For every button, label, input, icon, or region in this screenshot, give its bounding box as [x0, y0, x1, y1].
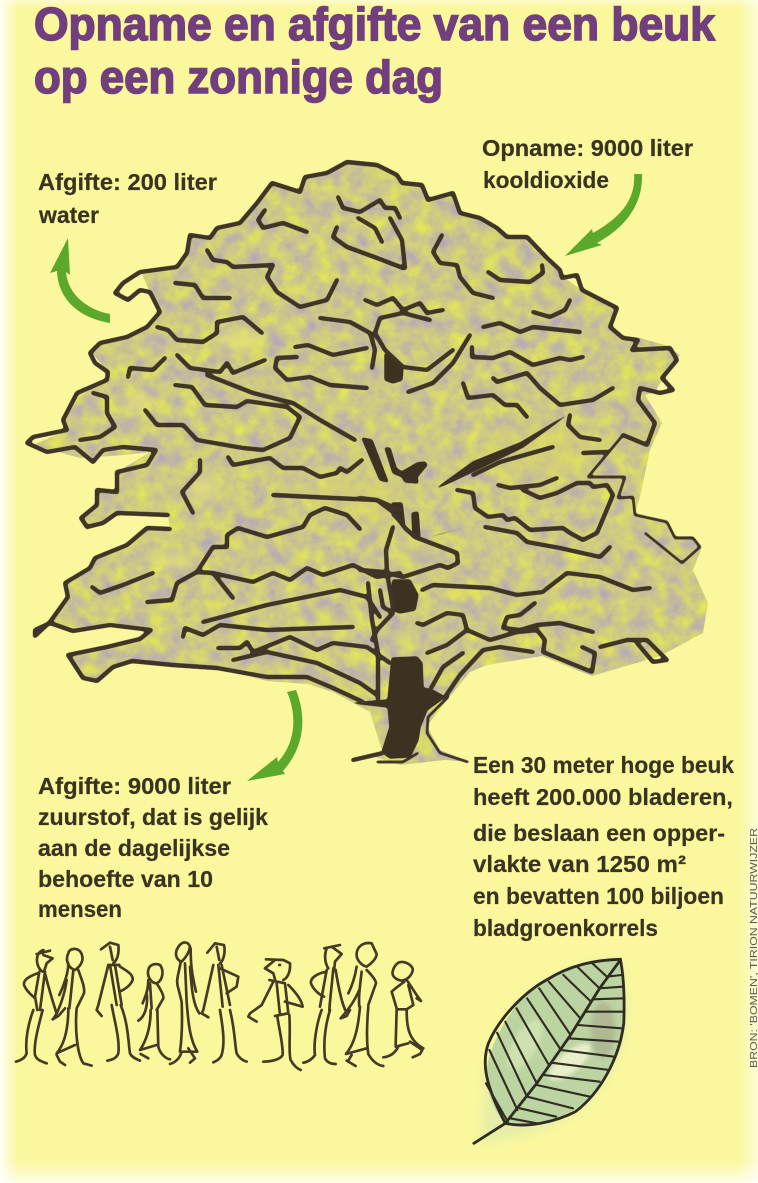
arrow: oxygen leaving [247, 690, 302, 781]
text: beech facts: en bevatten 100 biljoen [473, 883, 724, 909]
tree outline and branches [27, 162, 700, 762]
text: beech facts: vlakte van 1250 m² [473, 851, 686, 877]
text: oxygen release: behoefte van 10 [38, 866, 213, 892]
text: water release: Afgifte: 200 liter [38, 169, 217, 195]
text: oxygen release: Afgifte: 9000 liter [38, 773, 231, 799]
arrow: water leaving [50, 238, 110, 323]
text: carbon dioxide uptake [482, 135, 693, 193]
title [34, 0, 715, 103]
text: carbon dioxide uptake: kooldioxide [483, 167, 609, 193]
tree foliage [20, 150, 720, 780]
text: water release: water [38, 202, 99, 228]
text: beech facts [473, 752, 734, 941]
person 1 [16, 950, 56, 1063]
person 6 [202, 943, 247, 1062]
text: oxygen release [38, 773, 268, 922]
tree trunk [353, 353, 567, 758]
arrow: carbon dioxide entering [565, 174, 642, 256]
text: beech facts: bladgroenkorrels [473, 915, 658, 941]
person 10 [383, 962, 423, 1057]
person 2 [53, 949, 92, 1066]
person 9 [341, 943, 383, 1066]
person 3 [97, 943, 140, 1061]
person 8 [303, 945, 346, 1064]
person 4 [138, 964, 170, 1059]
icon: group of ten people [16, 942, 423, 1070]
person 5 [170, 942, 199, 1064]
text: oxygen release: zuurstof, dat is gelijk [38, 804, 268, 830]
tree illustration [20, 150, 720, 780]
text: oxygen release: mensen [38, 896, 122, 922]
person 7 [248, 959, 303, 1070]
title: op een zonnige dag [34, 51, 443, 103]
icon: beech leaf [474, 959, 626, 1143]
text: beech facts: die beslaan een opper- [473, 820, 725, 846]
text: beech facts: heeft 200.000 bladeren, [473, 784, 733, 810]
text: beech facts: Een 30 meter hoge beuk [473, 752, 734, 778]
text: carbon dioxide uptake: Opname: 9000 liter [482, 135, 693, 161]
text: water release [38, 169, 217, 228]
text: oxygen release: aan de dagelijkse [38, 835, 230, 861]
